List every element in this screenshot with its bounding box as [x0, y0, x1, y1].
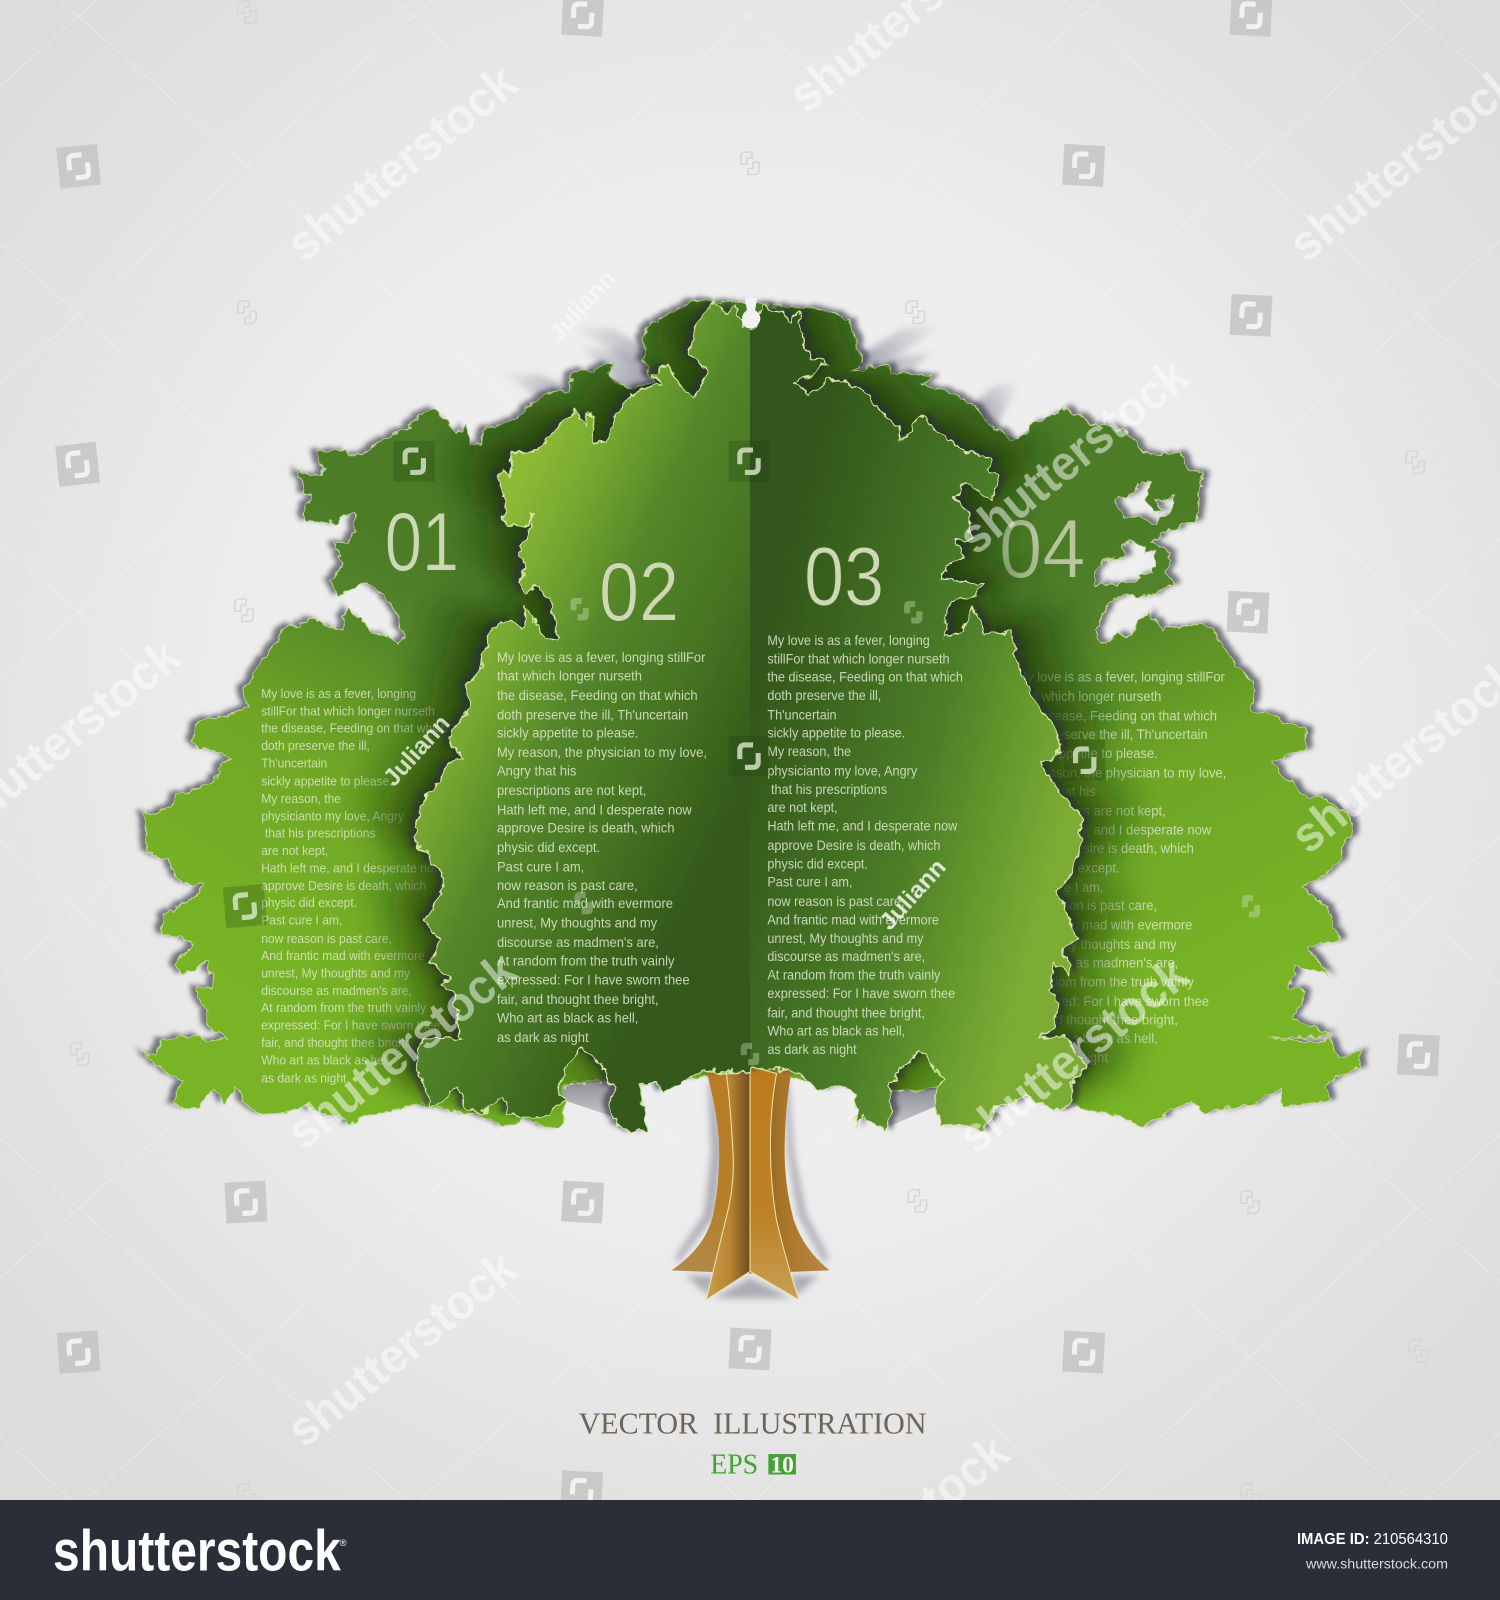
- poem 03: And frantic mad with evermore: [767, 912, 939, 928]
- poem 02: fair, and thought thee bright,: [497, 992, 659, 1007]
- watermark author names: Juliann: [544, 265, 621, 347]
- poem 02: prescriptions are not kept,: [497, 782, 646, 798]
- number 01: 01: [385, 495, 459, 589]
- poem 01: approve Desire is death, which: [261, 878, 426, 893]
- poem 04: doth preserve the ill, Th'uncertain: [1016, 726, 1208, 742]
- poem 02: unrest, My thoughts and my: [497, 915, 657, 931]
- poem 01: Th'uncertain: [261, 756, 327, 770]
- poem 03: Who art as black as hell,: [767, 1023, 905, 1039]
- trunk front right: [750, 1066, 799, 1300]
- poem 04: unrest, My thoughts and my: [1016, 936, 1177, 952]
- poem 04: fair, and thought thee bright,: [1016, 1012, 1178, 1028]
- poem 04: expressed: For I have sworn thee: [1016, 994, 1209, 1009]
- poem 02: Hath left me, and I desperate now: [497, 802, 692, 817]
- poem 02: And frantic mad with evermore: [497, 896, 673, 911]
- poem 01: My love is as a fever, longing: [261, 686, 416, 701]
- poem 02: approve Desire is death, which: [497, 820, 674, 836]
- poem 01: At random from the truth vainly: [261, 1001, 427, 1015]
- poem 01: sickly appetite to please.: [261, 774, 393, 789]
- gray notches under the crown: [403, 1071, 1104, 1127]
- poem 02: Past cure I am,: [497, 859, 584, 875]
- watermark author names: Juliann: [874, 854, 952, 936]
- poem 04: At random from the truth vainly: [1016, 974, 1194, 990]
- footer logo: shutterstock: [53, 1519, 341, 1583]
- poem 01: My reason, the: [261, 792, 341, 806]
- footer url: www.shutterstock.com: [1305, 1556, 1448, 1572]
- watermark author names: [378, 265, 952, 936]
- poem 03: physicianto my love, Angry: [767, 763, 917, 779]
- poem 03: unrest, My thoughts and my: [767, 930, 924, 946]
- top streak shadows: [500, 324, 1020, 429]
- poem 01: now reason is past care,: [261, 931, 392, 946]
- footer bar: [0, 1500, 1500, 1600]
- poem 03: physic did except.: [767, 856, 868, 872]
- poem 02: as dark as night: [497, 1029, 589, 1045]
- poem 02: My love is as a fever, longing stillFor: [497, 650, 706, 665]
- poem 04: Hath left me, and I desperate now: [1016, 822, 1211, 838]
- poem 04: Who art as black as hell,: [1016, 1030, 1158, 1046]
- poem 01: fair, and thought thee bright,: [261, 1035, 411, 1050]
- caption: EPS 10: [710, 1449, 796, 1480]
- caption: vector illustration: VECTOR ILLUSTRATION: [579, 1407, 927, 1441]
- watermark author names: Juliann: [378, 710, 456, 792]
- poem 04: that which longer nurseth: [1016, 688, 1161, 704]
- poem 03: are not kept,: [767, 800, 838, 815]
- trunk side and ground shadows: [676, 1082, 829, 1298]
- poem 02: Who art as black as hell,: [497, 1010, 638, 1026]
- trunk back right flap: [750, 1069, 830, 1273]
- poem 01: Past cure I am,: [261, 913, 342, 928]
- poem 01: physicianto my love, Angry: [261, 809, 405, 824]
- poem 03: doth preserve the ill,: [767, 687, 881, 703]
- poem 04: approve Desire is death, which: [1016, 841, 1194, 856]
- leaf shape 02: [414, 301, 770, 1132]
- poem 01: discourse as madmen's are,: [261, 983, 412, 998]
- poem 03: fair, and thought thee bright,: [767, 1005, 925, 1021]
- poem 02: that which longer nurseth: [497, 668, 642, 684]
- registered mark: ®: [340, 1538, 347, 1548]
- poem 04: Past cure I am,: [1016, 879, 1104, 895]
- number 04: 04: [999, 503, 1086, 596]
- poem 03: sickly appetite to please.: [767, 725, 905, 741]
- watermark words: shutterstock: [948, 947, 1199, 1164]
- poem 03: At random from the truth vainly: [767, 967, 941, 983]
- poem 04: Angry that his: [1016, 783, 1096, 799]
- poem 02: Angry that his: [497, 763, 576, 779]
- poem 01: physic did except.: [261, 896, 357, 910]
- watermark words: shutterstock: [277, 1240, 527, 1458]
- poem 02: the disease, Feeding on that which: [497, 687, 698, 703]
- poem 01: expressed: For I have sworn thee: [261, 1018, 440, 1033]
- poem 04: My love is as a fever, longing stillFor: [1016, 669, 1225, 685]
- poem 04: My reason, the physician to my love,: [1016, 765, 1226, 781]
- trunk back left flap: [671, 1066, 750, 1273]
- leaf shape 03: [730, 304, 1086, 1130]
- panel 03: center right leaf: [730, 304, 1086, 1130]
- poem 04: sickly appetite to please.: [1016, 746, 1158, 761]
- keyhole at top of the tree: [742, 298, 760, 329]
- number 03: 03: [804, 529, 884, 623]
- poem 02: discourse as madmen's are,: [497, 934, 659, 950]
- poem 03: expressed: For I have sworn thee: [767, 985, 955, 1001]
- poem 01: that his prescriptions: [265, 826, 376, 841]
- poem 03: discourse as madmen's are,: [767, 949, 925, 964]
- poem 01: unrest, My thoughts and my: [261, 966, 411, 981]
- trunk front left: [706, 1066, 750, 1300]
- leaf shape 01: [142, 301, 750, 1130]
- poem 03: Hath left me, and I desperate now: [767, 818, 958, 834]
- poem 02: My reason, the physician to my love,: [497, 745, 707, 760]
- watermark words: shutterstock: [948, 348, 1199, 565]
- poem 01: stillFor that which longer nurseth: [261, 704, 435, 718]
- poem 02: At random from the truth vainly: [497, 953, 675, 968]
- watermark words: shutterstock: [277, 55, 527, 272]
- image id: IMAGE ID: 210564310: [1297, 1531, 1448, 1548]
- poem 03: Past cure I am,: [767, 874, 852, 890]
- panel 01: left back leaf: [142, 276, 756, 1130]
- poem 04: now reason is past care,: [1016, 898, 1157, 913]
- poem 04: the disease, Feeding on that which: [1016, 708, 1217, 724]
- poem 03: stillFor that which longer nurseth: [767, 651, 950, 666]
- version badge: [768, 1454, 796, 1474]
- poem 01: are not kept,: [261, 844, 328, 858]
- poem 01: And frantic mad with evermore: [261, 949, 425, 963]
- poem 02: sickly appetite to please.: [497, 725, 638, 741]
- poem 03: My love is as a fever, longing: [767, 632, 930, 648]
- poem 01: Hath left me, and I desperate now: [261, 861, 443, 876]
- poem 01: Who art as black as hell,: [261, 1053, 393, 1067]
- number 02: 02: [599, 544, 679, 639]
- poem 04: And frantic mad with evermore: [1016, 917, 1192, 933]
- poem 04: prescriptions are not kept,: [1016, 803, 1166, 818]
- poem 02: physic did except.: [497, 839, 600, 855]
- cast shadow on panel 01: [353, 276, 756, 1126]
- EPS label: EPS: [710, 1449, 758, 1480]
- poem 03: now reason is past care,: [767, 894, 905, 909]
- poem 04: physic did except.: [1016, 860, 1120, 876]
- poem 02: expressed: For I have sworn thee: [497, 972, 690, 988]
- poem 02: doth preserve the ill, Th'uncertain: [497, 707, 688, 723]
- poem 03: as dark as night: [767, 1041, 857, 1057]
- panel 02: center left leaf: [414, 301, 770, 1132]
- poem 01: doth preserve the ill,: [261, 738, 370, 753]
- poem 03: My reason, the: [767, 744, 851, 759]
- poem 01: the disease, Feeding on that which: [261, 721, 448, 736]
- panel 04: right back leaf: [744, 279, 1359, 1127]
- trunk: [671, 1066, 830, 1300]
- poem 04: discourse as madmen's are,: [1016, 955, 1178, 970]
- caption: EPS 10: 10: [770, 1452, 794, 1478]
- poem 02: now reason is past care,: [497, 877, 638, 893]
- poem 03: approve Desire is death, which: [767, 837, 940, 853]
- watermark words: shutterstock: [277, 942, 527, 1160]
- cast shadow on panel 04: [744, 279, 1147, 1123]
- poem 03: the disease, Feeding on that which: [767, 669, 963, 685]
- poem 03: that his prescriptions: [771, 781, 887, 797]
- leaf shape 04: [750, 302, 1359, 1127]
- poem 04: as dark as night: [1016, 1050, 1108, 1065]
- poem 03: Th'uncertain: [767, 707, 837, 723]
- poem 01: as dark as night: [261, 1071, 347, 1086]
